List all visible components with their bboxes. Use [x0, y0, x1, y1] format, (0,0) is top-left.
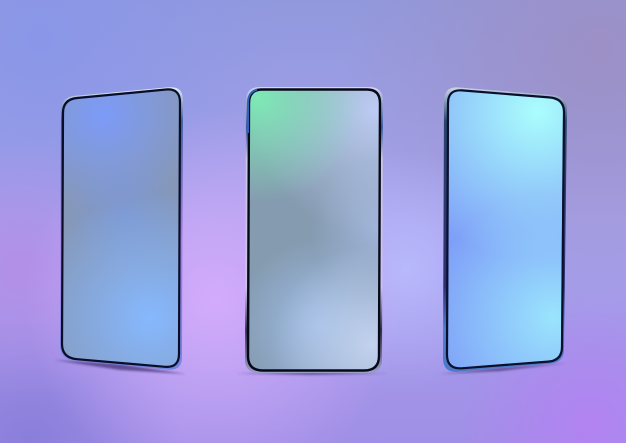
phone 2 shadow	[236, 372, 388, 375]
phone 1 shadow	[54, 360, 186, 374]
phone 2 metal frame	[245, 87, 383, 373]
phone 1 screen	[63, 90, 179, 366]
phone 2 black bezel	[248, 90, 380, 370]
phone 3 metal frame	[443, 87, 567, 372]
phone 2 screen	[249, 90, 379, 370]
phone 2: front view	[242, 87, 383, 376]
phone 2 blue edge highlight	[248, 90, 257, 133]
phone 3 shadow	[439, 363, 567, 374]
phone 3 black bezel	[447, 90, 564, 368]
phone 1: tilted left	[54, 80, 190, 375]
phone 1 metal frame	[60, 87, 183, 370]
phone 3: tilted right	[439, 85, 570, 375]
phone 3 screen	[448, 92, 563, 368]
phone 1 black bezel	[62, 89, 180, 367]
